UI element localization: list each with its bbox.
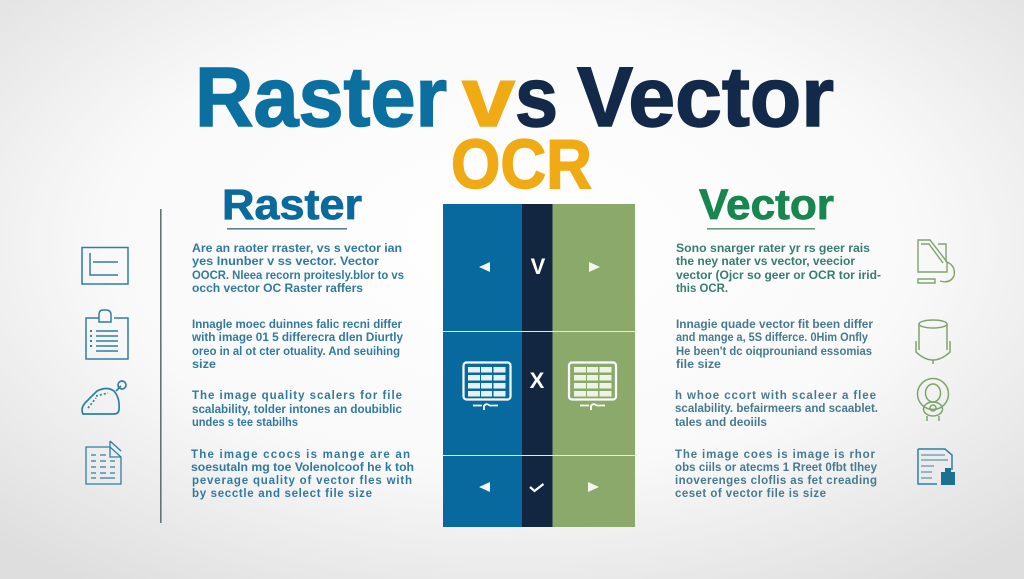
vector text block 4: The image coes is image is rhor	[675, 449, 876, 461]
title: s	[515, 50, 558, 144]
vector text block 2: He been't dc oiqprouniand essomias	[676, 346, 872, 358]
arrow: bottom left	[479, 482, 490, 492]
letter V: V	[531, 254, 546, 279]
raster text block 2	[191, 319, 404, 371]
vector text block 1: Sono snarger rater yr rs geer rais	[676, 243, 870, 255]
vector text block 2: Innagie quade vector fit been differ	[676, 319, 874, 331]
raster text block 1: occh vector OC Raster raffers	[192, 283, 363, 295]
arrow: bottom right	[588, 482, 599, 492]
vector text block 1: this OCR.	[676, 283, 728, 295]
comparison panel	[443, 204, 635, 527]
icon: vector monitor grid	[569, 362, 616, 410]
icon: check mark	[530, 484, 544, 491]
vector text block 3	[675, 390, 878, 429]
raster text block 4	[191, 449, 414, 500]
vector text block 1: the ney nater vs vector, veecior	[676, 256, 856, 268]
subtitle: OCR: OCR	[451, 125, 592, 203]
arrow: top right	[589, 262, 600, 272]
vector text block 3: h whoe ccort with scaleer a flee	[675, 390, 876, 402]
heading: Vector: Vector	[699, 181, 834, 229]
raster text block 2: size	[192, 359, 216, 371]
icon: raster mouse	[82, 381, 126, 414]
raster text block 1: OOCR. Nleea recorn proitesly.blor to vs	[192, 270, 404, 282]
vector text block 1	[676, 243, 881, 295]
vector text block 2: and mange a, 5S differce. 0Him Onfly	[676, 332, 869, 344]
title: Vector	[577, 50, 834, 144]
vector text block 2: file size	[676, 359, 721, 371]
icon: raster monitor grid	[464, 362, 510, 410]
raster text block 3	[192, 390, 403, 429]
raster text block 2: Innagle moec duinnes falic recni differ	[192, 319, 403, 331]
raster text block 4: by secctle and select file size	[192, 488, 372, 500]
vector text block 4: inoverenges cloflis as fet creading	[675, 475, 877, 487]
raster text block 1: Are an raoter rraster, vs s vector ian	[192, 243, 402, 255]
raster text block 3: The image quality scalers for file	[192, 390, 402, 402]
raster text block 2: oreo in al ot cter otuality. And seuihing	[192, 346, 400, 358]
raster text block 1: yes Inunber v ss vector. Vector	[192, 256, 380, 268]
raster text block 3: undes s tee stabilhs	[192, 417, 298, 429]
title	[195, 50, 834, 144]
raster text block 4: soesutaln mg toe Volenolcoof he k toh	[191, 462, 414, 474]
icon: vector cylinder	[916, 320, 950, 364]
vector text block 1: vector (Ojcr so geer or OCR tor irid-	[676, 270, 881, 282]
vector text block 4: ceset of vector file is size	[675, 488, 826, 500]
icon: raster document	[86, 441, 121, 484]
letter X: X	[530, 368, 545, 393]
raster text block 2: with image 01 5 differecra dlen Diurtly	[191, 332, 404, 344]
vector text block 4: obs ciils or atecms 1 Rreet 0fbt tlhey	[675, 462, 878, 474]
vector text block 3: tales and deoiils	[675, 417, 767, 429]
vector text block 4	[675, 449, 878, 500]
raster text block 1	[192, 243, 404, 295]
vector text block 2	[676, 319, 874, 371]
icon: vector pen tool	[918, 240, 954, 283]
icon: raster window	[82, 248, 128, 284]
icon: vector person badge	[918, 378, 948, 421]
raster text block 4: The image ccocs is mange are an	[191, 449, 410, 461]
heading: Raster: Raster	[222, 181, 362, 229]
icon: raster clipboard	[86, 310, 128, 359]
divider: left vertical rule	[160, 209, 162, 523]
raster text block 3: scalability, tolder intones an doubiblic	[192, 404, 403, 416]
arrow: top left	[479, 262, 490, 272]
icon: vector document	[918, 449, 955, 485]
raster text block 4: peverage quality of vector fles with	[192, 475, 412, 487]
vector text block 3: scalability. befairmeers and scaablet.	[675, 403, 878, 415]
title: v	[462, 50, 515, 144]
title: Raster	[195, 50, 447, 144]
